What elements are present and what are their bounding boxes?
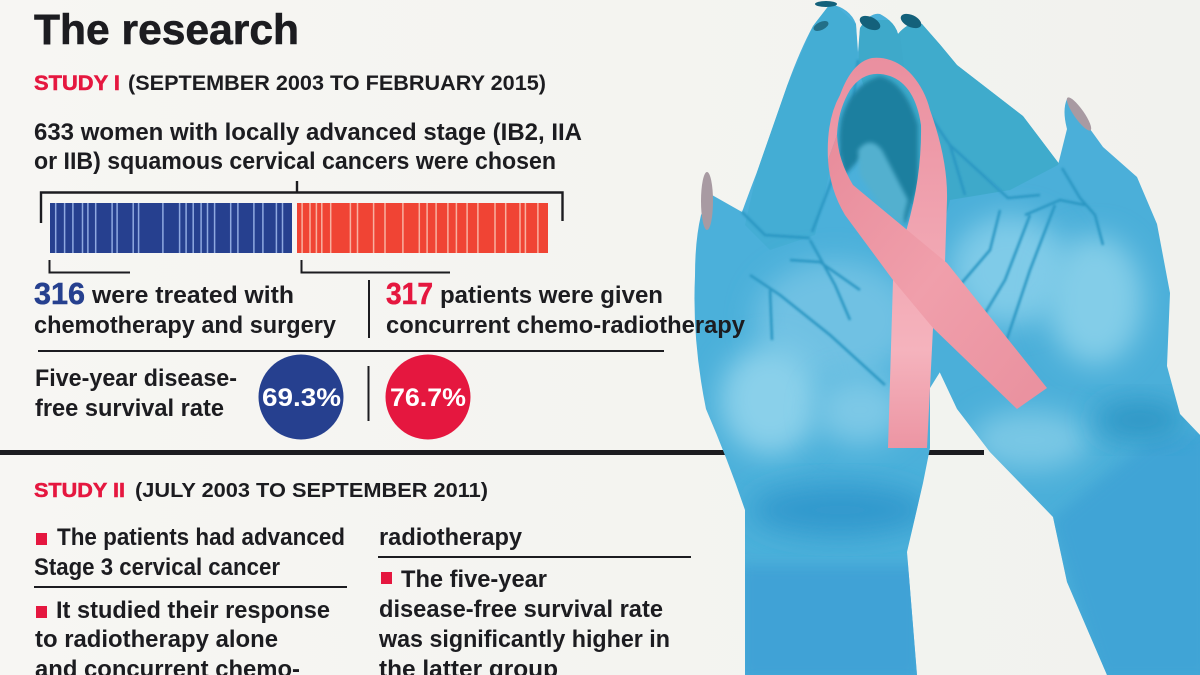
text block: 317 given concurrent chemo-radiotherapy: 317 bbox=[386, 276, 433, 311]
left palm light bbox=[755, 260, 915, 380]
icon: right hand bbox=[920, 90, 1200, 675]
finger inside ribbon loop bbox=[858, 142, 908, 225]
text block: Study II right column: was significantly higher in bbox=[378, 626, 670, 653]
ring finger bbox=[900, 24, 1058, 191]
bullet bbox=[381, 572, 392, 584]
subheading: Study II: (JULY 2003 TO SEPTEMBER 2011) bbox=[135, 480, 488, 502]
ribbon loop and left tail bbox=[828, 58, 947, 448]
text block: 317 given concurrent chemo-radiotherapy: patients were given bbox=[440, 282, 663, 309]
text block: Study II right column bbox=[378, 524, 691, 675]
text block: 317 given concurrent chemo-radiotherapy bbox=[368, 276, 746, 339]
hand creases and finger separations bbox=[742, 60, 1103, 385]
nails: thumb bbox=[701, 95, 1095, 230]
text block: Study II right column: disease-free survival rate bbox=[379, 596, 663, 623]
text block: Study II right column: The five-year bbox=[401, 566, 547, 593]
bracket: red group pointer bbox=[302, 260, 450, 272]
bar segment: red group bbox=[297, 203, 548, 253]
text block: 316 treated with chemotherapy and surgery: 316 bbox=[34, 276, 85, 311]
bullet bbox=[36, 533, 47, 545]
text block: 316 treated with chemotherapy and surgery bbox=[34, 276, 337, 339]
circle: 69.3% survival bbox=[258, 354, 344, 440]
icon: pink ribbon bbox=[828, 58, 1047, 448]
index finger bbox=[756, 6, 857, 174]
text block: five-year disease-free survival rate: Five-year disease- bbox=[35, 365, 237, 392]
text block: 317 given concurrent chemo-radiotherapy: concurrent chemo-radiotherapy bbox=[386, 312, 746, 339]
subheading: Study I: (SEPTEMBER 2003 TO FEBRUARY 2015) bbox=[128, 72, 546, 95]
right palm light bbox=[950, 215, 1070, 325]
text block: five-year disease-free survival rate: free survival rate bbox=[35, 395, 224, 422]
text block: study I intro bbox=[34, 119, 582, 175]
icon: left hand bbox=[690, 0, 1070, 675]
right wrist shadow bbox=[1050, 430, 1200, 675]
bullet bbox=[36, 606, 47, 618]
text block: study I intro: or IIB) squamous cervical cancers were chosen bbox=[34, 148, 556, 175]
bracket: total group bbox=[41, 181, 562, 223]
shadow inside ribbon loop bbox=[839, 76, 918, 225]
bar segment: blue group bbox=[50, 203, 292, 253]
text block: Study II left column bbox=[34, 524, 347, 675]
circle: 76.7% survival: 76.7% bbox=[390, 384, 466, 412]
bar chart: 316 blue and 317 red patients bbox=[50, 203, 548, 253]
text block: study I intro: 633 women with locally advanced stage (IB2, IIA bbox=[34, 119, 582, 146]
photo: blue hands holding pink ribbon bbox=[690, 0, 1200, 675]
ribbon right tail bbox=[828, 135, 1047, 409]
text block: Study II left column: to radiotherapy alone bbox=[35, 626, 278, 653]
bracket: blue group pointer bbox=[50, 260, 130, 272]
text block: Study II left column: It studied their response bbox=[56, 597, 330, 624]
text block: Study II left column: The patients had advanced bbox=[57, 524, 345, 551]
heading: The research: The research bbox=[34, 6, 299, 54]
left wrist shadow bbox=[750, 484, 930, 536]
middle finger bbox=[858, 20, 998, 213]
subheading: Study I: STUDY I bbox=[34, 72, 120, 95]
text block: five-year disease-free survival rate bbox=[35, 365, 237, 422]
nails: dark teal bbox=[812, 1, 924, 33]
text block: Study II left column: Stage 3 cervical cancer bbox=[34, 554, 280, 581]
subheading: Study II: STUDY II bbox=[34, 480, 125, 502]
circle: 69.3% survival: 69.3% bbox=[262, 384, 341, 412]
circle: 76.7% survival bbox=[386, 354, 470, 440]
text block: Study II right column: radiotherapy bbox=[379, 524, 523, 551]
text block: 316 treated with chemotherapy and surgery: were treated with bbox=[91, 282, 294, 309]
text block: 316 treated with chemotherapy and surgery: chemotherapy and surgery bbox=[34, 312, 337, 339]
